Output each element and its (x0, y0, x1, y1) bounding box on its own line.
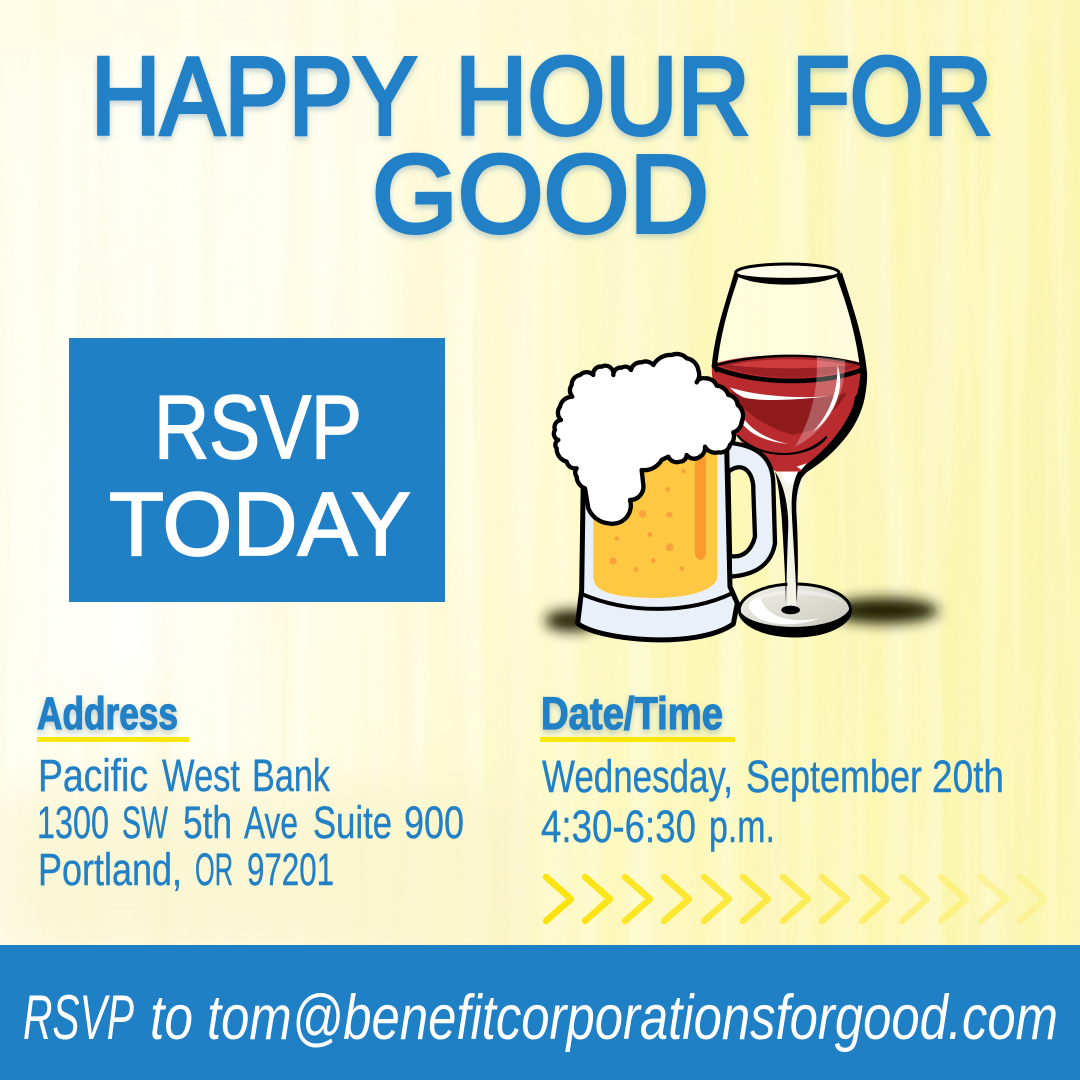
heading: date/time: Date/Time (541, 688, 723, 739)
text: address lines: 97201 (247, 844, 334, 895)
panel: RSVP today (69, 338, 445, 602)
title: GOOD (372, 133, 709, 256)
text: address lines: West (162, 750, 240, 801)
title: HAPPY (91, 35, 417, 158)
section: address (37, 688, 464, 895)
text: date and time lines (541, 751, 1004, 852)
footer banner: to (150, 983, 193, 1053)
panel: RSVP today: TODAY (109, 475, 411, 575)
icon: beer mug and wine glass (545, 264, 938, 640)
text: address lines: Ave (244, 797, 298, 848)
text: date and time lines: 4:30-6:30 (541, 801, 696, 852)
title: FOR (792, 35, 992, 158)
icon: wine glass (710, 264, 868, 636)
text: address lines: OR (195, 844, 233, 895)
text: address lines: Suite (313, 797, 392, 848)
icon: beer mug (554, 354, 775, 640)
text: date and time lines: p.m. (709, 801, 775, 852)
text: address lines: Portland, (38, 844, 182, 895)
footer banner (0, 945, 1080, 1080)
text: date and time lines: September (746, 751, 922, 802)
icon: beer foam (554, 354, 743, 524)
text: date and time lines: Wednesday, (542, 751, 733, 802)
text: address lines (37, 750, 464, 895)
icon: table shadow (545, 598, 938, 631)
text: address lines: 900 (404, 797, 464, 848)
title (91, 35, 992, 256)
text: address lines: 5th (183, 797, 232, 848)
text: address lines: 1300 (37, 797, 109, 848)
text: date and time lines: 20th (932, 751, 1004, 802)
section: date and time (540, 688, 1004, 852)
text: address lines: Pacific (38, 750, 148, 801)
title: HOUR (455, 35, 750, 158)
heading: address: Address (37, 688, 178, 739)
footer banner: RSVP (23, 983, 134, 1053)
panel: RSVP today: RSVP (154, 378, 362, 478)
text: address lines: SW (122, 797, 168, 848)
text: address lines: Bank (252, 750, 330, 801)
arrows: chevron row (546, 877, 1045, 921)
